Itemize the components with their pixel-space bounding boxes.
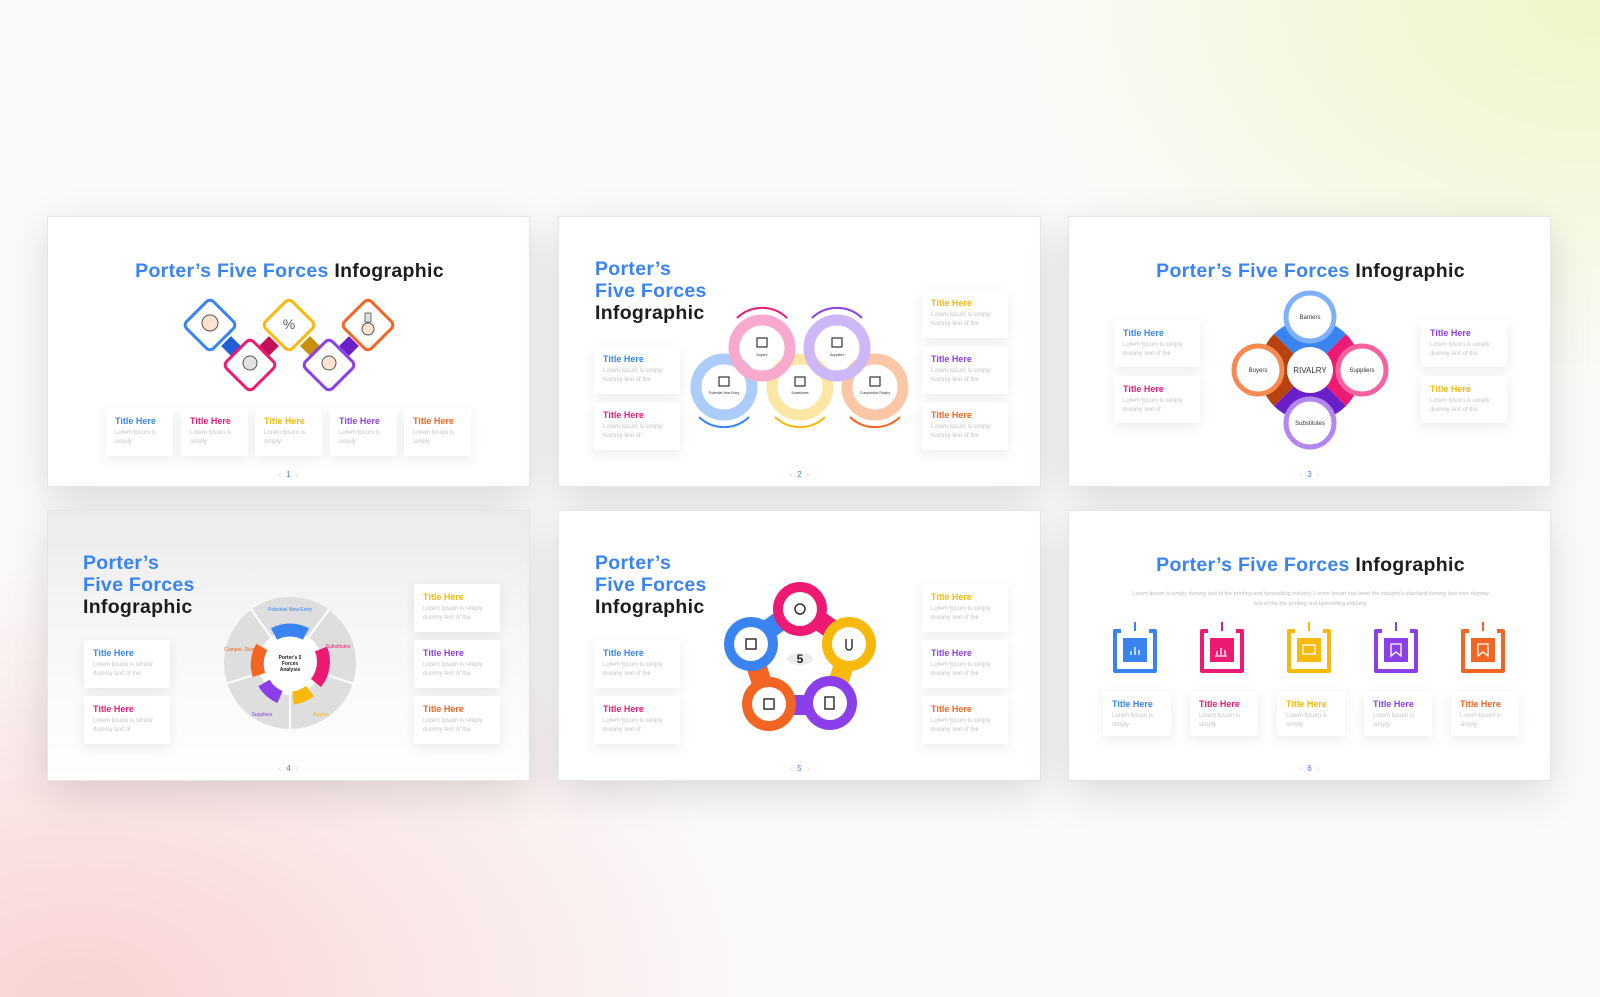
page number: ‹ 3 ›	[1300, 470, 1319, 479]
card left 2: Title Here	[603, 410, 644, 420]
rivalry diagram: Substitutes	[1295, 421, 1325, 427]
card 5	[1451, 691, 1519, 736]
card left 2	[1114, 376, 1200, 423]
page number: ‹ 6 ›	[1300, 764, 1319, 773]
card 1	[106, 408, 173, 456]
wheel diagram: Buyers	[313, 712, 329, 718]
card 5	[404, 408, 471, 456]
card right 2: Title Here	[423, 648, 464, 658]
card left 1: Lorem Ipsum is simply dummy text of the	[603, 662, 663, 677]
panel: slide 1 diamonds	[47, 216, 530, 487]
card left 2	[84, 696, 170, 744]
heading: Porter’s	[595, 552, 671, 574]
card left 1: Title Here	[603, 354, 644, 364]
wheel diagram: Forces	[282, 661, 298, 667]
card 3: Title Here	[264, 416, 305, 426]
card left 1	[594, 640, 680, 688]
card left 1: Title Here	[603, 648, 644, 658]
heading: Porter’s	[595, 258, 671, 280]
card 2	[1190, 691, 1258, 736]
heading: Five Forces	[595, 574, 707, 596]
card 4: Title Here	[1373, 699, 1414, 709]
panel: slide 2 rings	[558, 216, 1041, 487]
card 2: Lorem Ipsum is simply	[1199, 713, 1240, 728]
card left 2: Lorem Ipsum is simply dummy text of	[93, 718, 153, 733]
heading: Porter’s Five Forces Infographic	[135, 260, 444, 282]
card 4: Lorem Ipsum is simply	[1373, 713, 1414, 728]
card 4: Title Here	[339, 416, 380, 426]
heading: Porter’s Five Forces Infographic	[1156, 260, 1465, 282]
diamond chain diagram: %	[283, 316, 295, 332]
card 5: Lorem Ipsum is simply	[1460, 713, 1501, 728]
page number: ‹ 1 ›	[279, 470, 298, 479]
card left 2	[594, 696, 680, 744]
heading	[595, 258, 707, 324]
card right 3: Title Here	[931, 704, 972, 714]
wheel diagram: Analysis	[280, 667, 300, 673]
card left 1: Lorem Ipsum is simply dummy text of the	[93, 662, 153, 677]
card 2	[181, 408, 248, 456]
ring diagram: Suppliers	[830, 353, 845, 357]
card right 3: Lorem Ipsum is simply dummy text of the	[931, 424, 991, 439]
heading	[595, 552, 707, 618]
card right 3	[922, 696, 1008, 744]
page number: ‹ 2 ›	[790, 470, 809, 479]
card 4	[1364, 691, 1432, 736]
card right 1	[1421, 320, 1507, 367]
card right 2	[414, 640, 500, 688]
card 1	[1103, 691, 1171, 736]
card right 1	[922, 584, 1008, 632]
card left 1: Title Here	[1123, 328, 1164, 338]
heading: Five Forces	[83, 574, 195, 596]
card right 1	[414, 584, 500, 632]
card 5: Title Here	[1460, 699, 1501, 709]
ring diagram: Substitutes	[791, 391, 809, 395]
diamond chain diagram	[184, 298, 394, 392]
pentagon diagram	[724, 582, 876, 731]
wheel diagram: Potential New Entry	[268, 607, 312, 613]
card right 2: Title Here	[1430, 384, 1471, 394]
panel: slide 4 analysis wheel	[47, 510, 530, 781]
card 3: Title Here	[1286, 699, 1327, 709]
heading: Five Forces	[595, 280, 707, 302]
rivalry diagram: Barriers	[1299, 315, 1321, 321]
wheel diagram: Suppliers	[252, 712, 273, 718]
card right 2	[1421, 376, 1507, 423]
card left 1	[594, 346, 680, 394]
card right 1: Title Here	[423, 592, 464, 602]
card right 3	[922, 402, 1008, 450]
card right 2	[922, 346, 1008, 394]
card right 1: Title Here	[931, 298, 972, 308]
card left 2: Title Here	[93, 704, 134, 714]
intro paragraph: Lorem Ipsum is simply dummy text of the printing and typesetting industry. Lorem Ipsum has been the industry's standard dummy text ever dummy text of the the printing and typesetting industry.	[1132, 591, 1489, 607]
card right 3: Lorem Ipsum is simply dummy text of the	[931, 718, 991, 733]
card right 1: Lorem Ipsum is simply dummy text of the	[423, 606, 483, 621]
card 3	[1277, 691, 1345, 736]
card right 2	[922, 640, 1008, 688]
panel: slide 5 pentagon	[558, 510, 1041, 781]
card left 1	[84, 640, 170, 688]
card right 2: Title Here	[931, 648, 972, 658]
rivalry diagram	[1232, 290, 1388, 450]
ring diagram: Buyers	[757, 353, 768, 357]
card left 1: Lorem Ipsum is simply dummy text of the	[603, 368, 663, 383]
card left 1	[1114, 320, 1200, 367]
panel: slide 3 rivalry	[1068, 216, 1551, 487]
ring diagram: Competitive Rivalry	[860, 391, 890, 395]
wheel diagram: Substitutes	[326, 644, 351, 650]
wheel diagram: Compet. Rivalry	[224, 647, 260, 653]
card left 2: Title Here	[603, 704, 644, 714]
card right 3: Lorem Ipsum is simply dummy text of the	[423, 718, 483, 733]
card 1: Lorem Ipsum is simply	[1112, 713, 1153, 728]
heading	[83, 552, 195, 618]
card right 3: Title Here	[423, 704, 464, 714]
card left 2	[594, 402, 680, 450]
card right 1: Lorem Ipsum is simply dummy text of the	[1430, 342, 1490, 357]
card right 2: Title Here	[931, 354, 972, 364]
card left 2: Lorem Ipsum is simply dummy text of	[603, 424, 663, 439]
card 4	[330, 408, 397, 456]
card 2: Lorem Ipsum is simply	[190, 430, 231, 445]
card right 2: Lorem Ipsum is simply dummy text of the	[931, 662, 991, 677]
card right 2: Lorem Ipsum is simply dummy text of the	[423, 662, 483, 677]
card right 1: Lorem Ipsum is simply dummy text of the	[931, 312, 991, 327]
wheel diagram	[224, 597, 356, 729]
ring diagram	[690, 306, 908, 428]
icon row	[1113, 622, 1505, 673]
card right 1: Title Here	[931, 592, 972, 602]
panel: slide 6 icon row	[1068, 510, 1551, 781]
pentagon diagram: 5	[797, 652, 804, 666]
heading: Porter’s	[83, 552, 159, 574]
card 5: Lorem Ipsum is simply	[413, 430, 454, 445]
card 3: Lorem Ipsum is simply	[1286, 713, 1327, 728]
heading: Infographic	[595, 596, 704, 618]
card 4: Lorem Ipsum is simply	[339, 430, 380, 445]
card right 2: Lorem Ipsum is simply dummy text of the	[931, 368, 991, 383]
rivalry diagram: Buyers	[1249, 368, 1267, 374]
card 1: Title Here	[1112, 699, 1153, 709]
card right 2: Lorem Ipsum is simply dummy text of the	[1430, 398, 1490, 413]
card left 1: Title Here	[93, 648, 134, 658]
card 2: Title Here	[1199, 699, 1240, 709]
page number: ‹ 4 ›	[279, 764, 298, 773]
card right 3: Title Here	[931, 410, 972, 420]
page number: ‹ 5 ›	[790, 764, 809, 773]
card left 2: Lorem Ipsum is simply dummy text of	[1123, 398, 1183, 413]
card 1: Title Here	[115, 416, 156, 426]
card 3: Lorem Ipsum is simply	[264, 430, 305, 445]
heading: Infographic	[595, 302, 704, 324]
card 1: Lorem Ipsum is simply	[115, 430, 156, 445]
card right 1	[922, 290, 1008, 338]
heading: Porter’s Five Forces Infographic	[1156, 554, 1465, 576]
card 2: Title Here	[190, 416, 231, 426]
card right 3	[414, 696, 500, 744]
card left 2: Title Here	[1123, 384, 1164, 394]
ring diagram: Potential New Entry	[709, 391, 740, 395]
card left 1: Lorem Ipsum is simply dummy text of the	[1123, 342, 1183, 357]
heading: Infographic	[83, 596, 192, 618]
card 5: Title Here	[413, 416, 454, 426]
card right 1: Lorem Ipsum is simply dummy text of the	[931, 606, 991, 621]
wheel diagram: Porter's 5	[279, 655, 302, 661]
rivalry diagram: RIVALRY	[1293, 366, 1327, 375]
rivalry diagram: Suppliers	[1349, 368, 1375, 374]
card right 1: Title Here	[1430, 328, 1471, 338]
card left 2: Lorem Ipsum is simply dummy text of	[603, 718, 663, 733]
card 3	[255, 408, 322, 456]
